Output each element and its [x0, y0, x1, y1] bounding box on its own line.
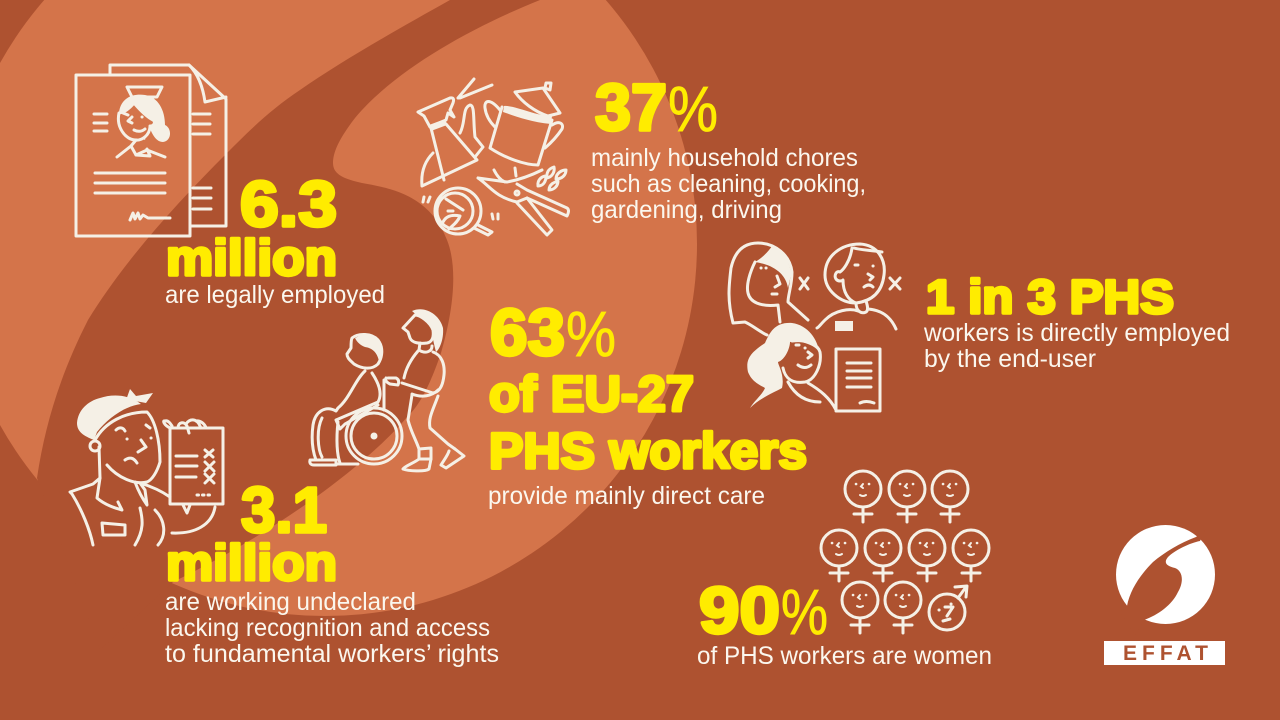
stat: 90%: [699, 573, 828, 648]
stat: 37%: [595, 70, 718, 145]
caption: legally employed: are legally employed: [165, 281, 385, 309]
icon: three workers and contract: [729, 243, 900, 411]
stat: 6.3: 6.3: [240, 168, 337, 240]
panel: 90% women: [697, 471, 992, 670]
stat: million: million: [166, 230, 337, 286]
icon: carer pushing wheelchair: [310, 309, 464, 471]
logo wordmark: EFFAT: [1123, 642, 1208, 665]
icon: worker with list: [70, 389, 223, 545]
caption: women: of PHS workers are women: [697, 642, 992, 670]
icon: gender symbols: [821, 471, 989, 633]
logo: EFFAT: [1104, 525, 1225, 665]
panel: 37% household chores: [418, 70, 866, 235]
caption: direct care: provide mainly direct care: [488, 482, 765, 510]
caption: household chores: such as cleaning, cooking,: [591, 170, 866, 198]
stat: 63%: [490, 295, 616, 370]
panel: 63% direct care: [310, 295, 807, 510]
caption: directly employed: by the end-user: [924, 345, 1096, 373]
stat: million: million: [166, 535, 337, 591]
stat: PHS workers: PHS workers: [489, 423, 807, 479]
caption: household chores: gardening, driving: [591, 196, 782, 224]
icon: employment contract: [76, 65, 226, 236]
caption: household chores: mainly household chores: [591, 144, 858, 172]
background swoosh: [0, 0, 697, 650]
stat: 37%: %: [668, 73, 718, 145]
caption: working undeclared: lacking recognition and access: [165, 614, 490, 642]
stat: 90%: 90: [699, 573, 780, 647]
caption: working undeclared: are working undeclared: [165, 588, 416, 616]
stat: 37%: 37: [595, 70, 667, 144]
panel: 1 in 3 PHS: [729, 243, 1230, 411]
stat: 1 in 3 PHS: 1 in 3 PHS: [926, 270, 1174, 323]
logo mark: [1116, 525, 1215, 635]
stat: 90%: %: [781, 576, 828, 648]
panel: 3.1 million undeclared: [70, 389, 499, 668]
stat: 63%: 63: [490, 295, 565, 369]
panel: 6.3 million legally employed: [76, 65, 385, 309]
caption: directly employed: workers is directly employed: [923, 319, 1230, 347]
stat: 3.1: 3.1: [241, 474, 327, 546]
stat: of EU-27: of EU-27: [489, 366, 694, 422]
stat: 63%: %: [566, 298, 616, 370]
icon: household chores: [418, 79, 568, 235]
caption: working undeclared: to fundamental workers’ rights: [165, 640, 499, 668]
